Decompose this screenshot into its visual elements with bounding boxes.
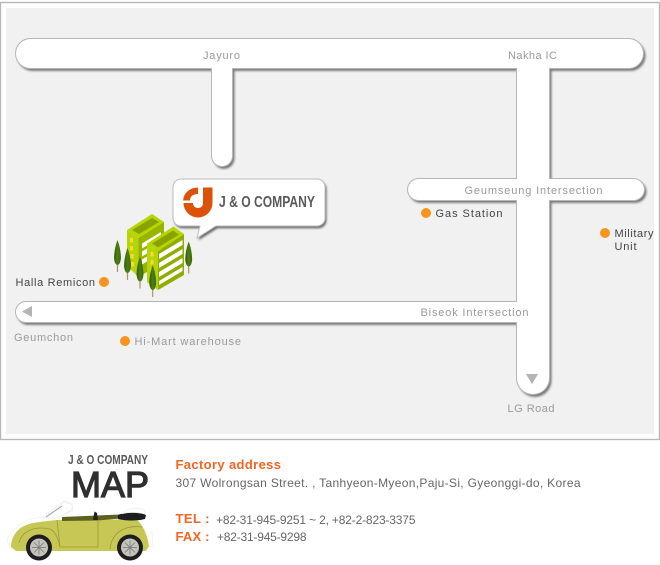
road: Geumseung Intersection xyxy=(408,179,644,200)
label: Geumchon: Geumchon xyxy=(14,332,73,344)
label: LG Road: LG Road xyxy=(508,403,554,415)
icon: green buildings with trees xyxy=(114,214,192,297)
fax: +82-31-945-9298 xyxy=(217,530,307,544)
landmark: Military Unit: Unit xyxy=(614,241,636,253)
road: Nakha IC to LG Road xyxy=(517,60,549,394)
icon: company logo xyxy=(183,188,212,218)
label: Jayuro: Jayuro xyxy=(203,50,240,62)
telephone: +82-31-945-9251 ~ 2, +82-2-823-3375 xyxy=(216,513,416,527)
hood highlight xyxy=(7,501,153,550)
fax xyxy=(176,529,307,544)
arrow: toward Geumchon xyxy=(22,306,32,317)
landmark: Military Unit xyxy=(600,228,654,253)
landmark: Gas Station: Gas Station xyxy=(436,208,502,220)
heading: J & O Company Map: J & O COMPANY xyxy=(68,453,149,467)
factory address heading: Factory address xyxy=(176,457,281,472)
rear wheel xyxy=(117,534,143,560)
road: Jayuro xyxy=(16,39,643,68)
door lines xyxy=(19,520,142,549)
car body xyxy=(11,520,149,551)
landmark: Hi-Mart warehouse: Hi-Mart warehouse xyxy=(134,336,241,348)
front building xyxy=(147,226,184,290)
telephone: TEL : xyxy=(176,511,210,526)
front wheel xyxy=(26,534,52,560)
folded roof xyxy=(118,513,146,520)
fax: FAX : xyxy=(176,529,210,544)
heading: J & O Company Map: MAP xyxy=(71,464,149,505)
road network xyxy=(16,39,646,396)
landmark: Military Unit: Military xyxy=(614,228,654,240)
rear highlight xyxy=(138,520,151,541)
arrow: toward LG Road xyxy=(526,374,538,384)
trees xyxy=(114,240,192,297)
callout: J & O Company xyxy=(173,179,326,240)
map frame xyxy=(0,2,660,440)
label: Geumseung Intersection: Geumseung Intersection xyxy=(464,185,602,197)
label: Nakha IC: Nakha IC xyxy=(508,50,557,62)
contact details xyxy=(176,457,581,544)
seat xyxy=(93,512,98,520)
road: Biseok Intersection xyxy=(16,302,530,322)
landmark: Halla Remicon: Halla Remicon xyxy=(16,277,95,289)
road: Jayuro branch xyxy=(212,60,232,166)
windshield xyxy=(43,502,72,518)
back building xyxy=(127,214,164,277)
label: Biseok Intersection: Biseok Intersection xyxy=(420,307,528,319)
road labels xyxy=(14,50,602,415)
logo wordmark: J & O COMPANY xyxy=(219,194,316,211)
factory address: 307 Wolrongsan Street. , Tanhyeon-Myeon,Paju-Si, Gyeonggi-do, Korea xyxy=(176,476,581,490)
icon: yellow convertible car xyxy=(7,501,153,560)
interior xyxy=(62,514,120,521)
